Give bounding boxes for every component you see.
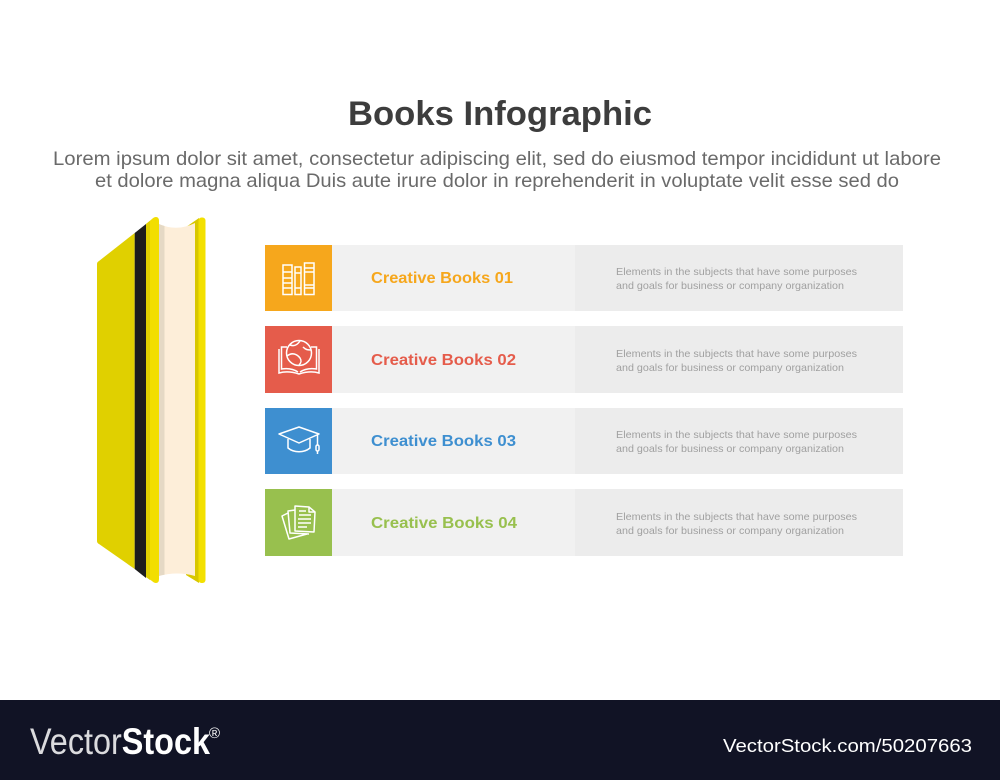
row 2 heading: Creative Books 02: [371, 352, 516, 369]
row 3 description: Elements in the subjects that have some purposes: [616, 429, 857, 441]
row 2 description: and goals for business or company organization: [616, 362, 844, 374]
row 3: [265, 408, 903, 474]
row 3 description: and goals for business or company organization: [616, 443, 844, 455]
row 3 description: [616, 429, 857, 455]
row 3 description panel: [575, 408, 903, 474]
row 2 description: Elements in the subjects that have some purposes: [616, 348, 857, 360]
row 2 background: [332, 326, 575, 393]
row 2: [265, 326, 903, 393]
title: Books Infographic: [348, 95, 652, 133]
row 1 icon square: [265, 245, 332, 311]
row 4 icon square: [265, 489, 332, 556]
row 4 background: [332, 489, 575, 556]
row 1 description: and goals for business or company organization: [616, 280, 844, 292]
row 1 description panel: [575, 245, 903, 311]
footer image id: VectorStock.com/50207663: [723, 736, 972, 756]
row 1: [265, 245, 903, 311]
subtitle text: [53, 148, 941, 192]
registered mark: ®: [209, 725, 220, 742]
row 2 description: [616, 348, 857, 374]
row 1 description: [616, 266, 857, 292]
footer bar: [0, 700, 1000, 780]
row 3 heading: Creative Books 03: [371, 433, 516, 450]
row 1 description: Elements in the subjects that have some purposes: [616, 266, 857, 278]
row 4 heading: Creative Books 04: [371, 515, 517, 532]
row 1 heading: Creative Books 01: [371, 270, 513, 287]
icon: open book with globe: [279, 340, 319, 374]
row 1 background: [332, 245, 575, 311]
row 4 description panel: [575, 489, 903, 556]
row 2 icon square: [265, 326, 332, 393]
row 3 icon square: [265, 408, 332, 474]
row 4: [265, 489, 903, 556]
subtitle text: Lorem ipsum dolor sit amet, consectetur adipiscing elit, sed do eiusmod tempor incididunt ut labore: [53, 148, 941, 170]
footer logo: VectorStock: [30, 721, 210, 762]
book illustration: [97, 217, 206, 583]
row 4 description: and goals for business or company organization: [616, 525, 844, 537]
row 4 description: Elements in the subjects that have some purposes: [616, 511, 857, 523]
icon: books: [283, 263, 314, 294]
row 2 description panel: [575, 326, 903, 393]
icon: documents: [282, 506, 315, 539]
row 4 description: [616, 511, 857, 537]
row 3 background: [332, 408, 575, 474]
icon: graduation cap: [279, 427, 319, 454]
subtitle text: et dolore magna aliqua Duis aute irure dolor in reprehenderit in voluptate velit esse sed do: [95, 170, 899, 192]
